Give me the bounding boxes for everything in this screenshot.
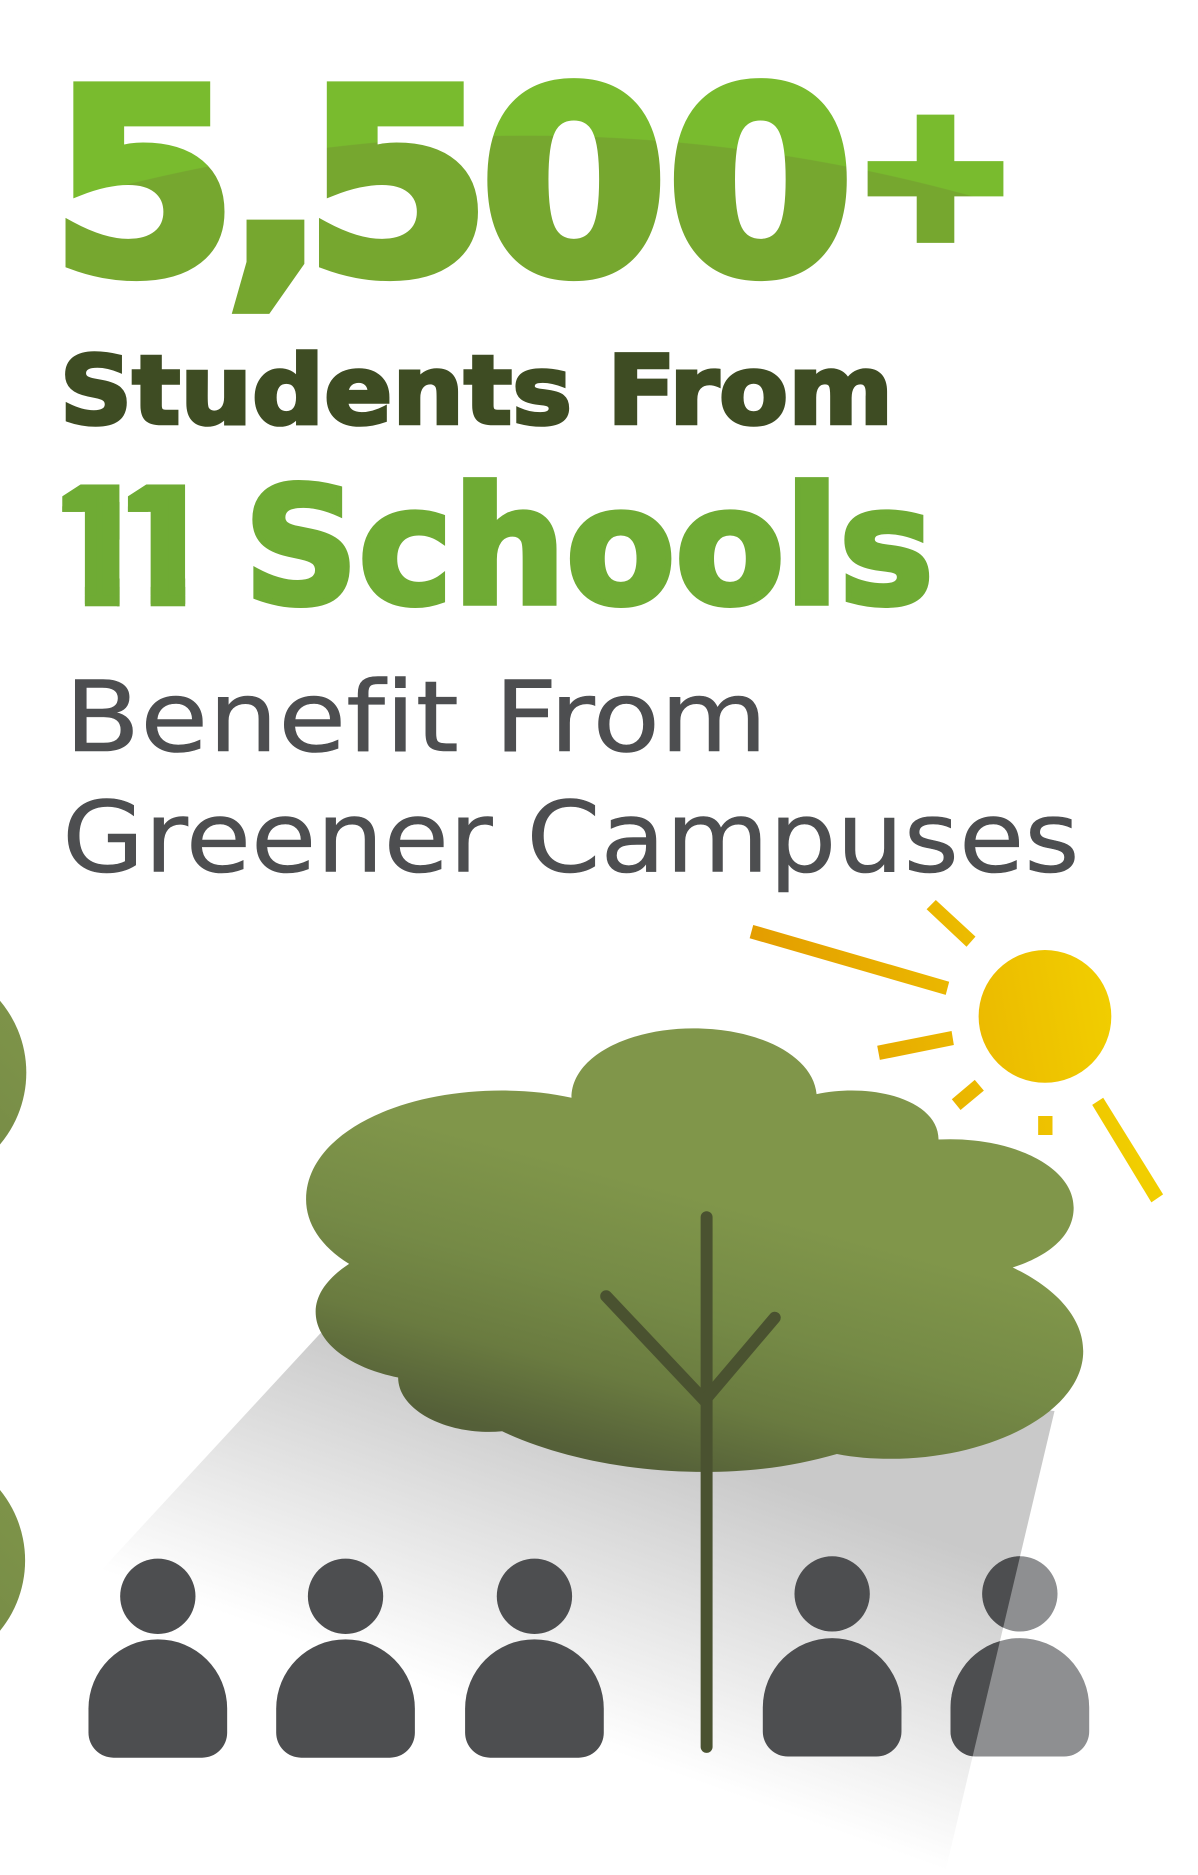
sun disc <box>979 950 1111 1083</box>
tree shade on ground <box>72 1333 1055 1875</box>
person 1 <box>88 1559 227 1758</box>
person 4 <box>763 1556 901 1756</box>
sun rays <box>750 900 1163 1202</box>
tree canopy <box>306 1028 1083 1472</box>
person 2 <box>276 1559 415 1758</box>
title: 5,500+: 0 <box>666 36 855 334</box>
title: 5,500+: 0 <box>479 36 668 334</box>
person 3 <box>465 1559 604 1758</box>
heading: 11 Schools <box>62 477 930 608</box>
person 5 partly in shade <box>951 1556 1089 1756</box>
number 11: 11 <box>49 453 208 640</box>
word Schools: Schools <box>244 454 934 642</box>
icon: partial tree at left, upper <box>0 961 26 1184</box>
heading: Students From: Students From <box>60 334 893 446</box>
icon: sun with rays <box>750 900 1163 1202</box>
tree trunk and branches <box>606 1217 775 1747</box>
icon: partial tree at left, lower <box>0 1449 25 1672</box>
text: Greener Campuses: Greener Campuses <box>62 782 1080 896</box>
title: 5,500+: + <box>855 68 1016 279</box>
title: 5,500+: , <box>224 36 327 334</box>
tree <box>306 1028 1083 1747</box>
title: 5,500+: 5 <box>50 36 238 334</box>
text: Benefit From: Benefit From <box>65 661 768 775</box>
title: 5,500+: 5 <box>303 36 492 334</box>
people row <box>88 1556 1089 1758</box>
